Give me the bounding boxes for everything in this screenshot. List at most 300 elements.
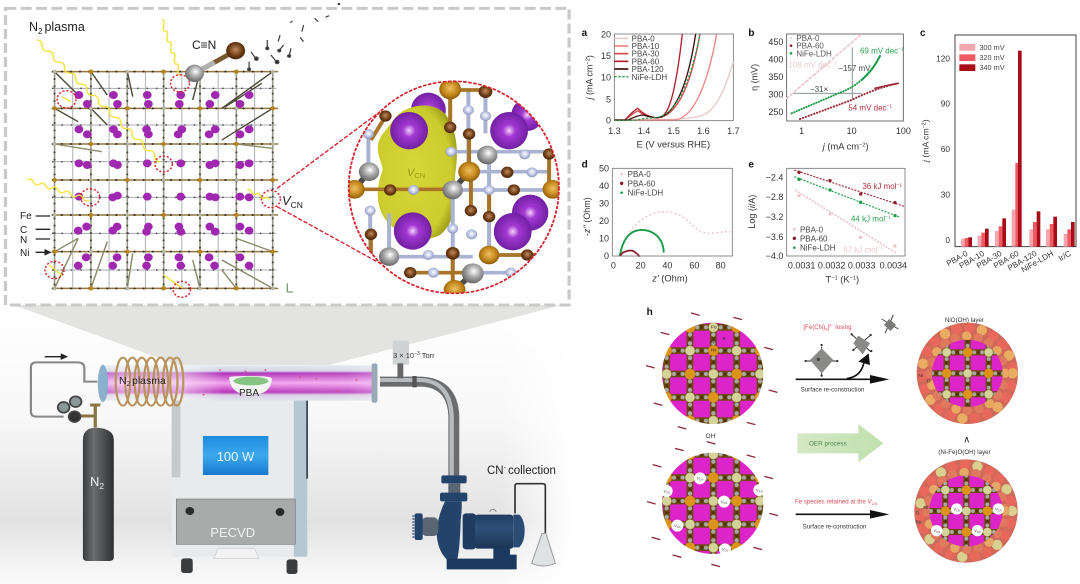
- x axis title: ): [865, 141, 869, 151]
- power display: [203, 436, 268, 475]
- data points: PBA-60: [799, 172, 895, 203]
- back spheres: [411, 92, 446, 114]
- x axis category labels: PBA-0: [945, 249, 970, 268]
- cylinder valve: [69, 405, 100, 427]
- axis ticks: −2.4: [766, 173, 783, 183]
- flow arrow: [45, 355, 67, 359]
- control panel: [176, 499, 295, 544]
- activation energy labels: −1: [897, 182, 902, 188]
- knobs: [185, 507, 284, 516]
- axis ticks: 1.4: [638, 126, 650, 136]
- axis ticks: 0.0032: [818, 260, 845, 270]
- activation energy labels: −1: [878, 246, 883, 252]
- axis ticks: −3.6: [766, 232, 783, 242]
- motor: [475, 509, 525, 549]
- data points: PBA-0: [799, 196, 895, 246]
- wheels: [181, 558, 297, 574]
- vacancy labels: V: [674, 523, 677, 528]
- x axis category labels: PBA-30: [975, 249, 1004, 270]
- potassium spheres: [78, 95, 249, 266]
- nickel atoms: [359, 146, 497, 283]
- label: N2 plasma: plasma: [44, 20, 85, 34]
- inner tan atoms: [930, 336, 1005, 411]
- legend: PBA-60: [628, 179, 656, 188]
- gauge pressure reading: 3 × 10: [393, 351, 414, 360]
- label: Fe(CN)6 losing: 6: [825, 327, 828, 332]
- lattice bonds: [355, 89, 556, 293]
- label: surface re-construction top: Surface re-construction: [801, 387, 865, 394]
- axis ticks: 0.0033: [848, 260, 875, 270]
- particle: NiO(OH) layer: [917, 323, 1018, 424]
- axis ticks: 300: [768, 89, 783, 99]
- label: CN collection: collection: [508, 465, 556, 477]
- activation energy labels: −1: [885, 215, 891, 221]
- axis ticks: 50: [599, 164, 609, 174]
- atom labels: Fe: [711, 324, 717, 330]
- axis ticks: 80: [716, 260, 726, 270]
- y axis title: −2: [585, 58, 591, 65]
- atom labels: [711, 324, 727, 353]
- label: OH-: OH: [706, 433, 715, 440]
- vacancy labels: CN: [699, 478, 703, 482]
- x axis title: −1: [850, 275, 856, 281]
- legend: [959, 43, 1005, 72]
- panel letter: a: [582, 28, 588, 39]
- pristine core: [932, 340, 1003, 407]
- panel letter: c: [920, 28, 926, 39]
- series: [787, 34, 898, 119]
- data points: NiFe-LDH: [799, 179, 895, 216]
- axis ticks: 350: [768, 72, 783, 82]
- x axis category labels: Ir/C: [1057, 249, 1073, 263]
- vacancy labels: CN: [977, 530, 981, 534]
- collection tube: [515, 484, 545, 533]
- atom labels: N: [711, 339, 715, 345]
- curved arrow head: [858, 353, 870, 365]
- PBA sample boat: [229, 376, 272, 395]
- y axis title: η (mV): [749, 64, 759, 91]
- label: Fe(CN)6 losing: losing: [834, 324, 852, 331]
- label: CN collection: -: [504, 465, 507, 472]
- label: Fe: Fe: [20, 211, 32, 222]
- legend: 320 mV: [979, 53, 1005, 62]
- nitrogen atoms: [363, 105, 537, 278]
- axis ticks: 60: [689, 260, 699, 270]
- label: Fe species retained: Fe species retained at the V: [795, 499, 872, 506]
- x axis title: −2: [859, 142, 865, 148]
- floor fade at right edge: [500, 305, 573, 584]
- tan shell atoms: [922, 328, 1013, 419]
- vacancy labels: V: [933, 528, 936, 533]
- x axis title: ): [856, 274, 859, 284]
- legend: PBA-60: [632, 57, 660, 66]
- slope annotations: −1: [887, 104, 892, 110]
- axis ticks: 15: [601, 51, 611, 61]
- plot frame: [787, 34, 903, 121]
- collection flask: [532, 533, 555, 566]
- vacancy labels: CN: [998, 508, 1002, 512]
- labels: crystal panel: [20, 20, 425, 259]
- label: Ni: Ni: [20, 248, 29, 259]
- hydroxide ions: [646, 313, 778, 567]
- label: N2 plasma in tube: plasma: [132, 375, 166, 387]
- slope annotations: 108 mV dec: [788, 60, 831, 69]
- legend: NiFe-LDH: [796, 49, 832, 58]
- inner shell atoms: [927, 472, 1005, 550]
- x axis title: T: [826, 274, 831, 284]
- legend: PBA-0: [628, 170, 651, 179]
- activation energy labels: 36 kJ mol: [862, 182, 897, 191]
- panel letter: b: [748, 28, 754, 39]
- floor shading: [0, 305, 572, 584]
- potassium sphere: [394, 212, 432, 250]
- reaction arrow: top: [796, 353, 889, 384]
- particle: (Ni-Fe)O(OH) layer: [914, 459, 1018, 563]
- vacancy labels: V: [697, 476, 699, 481]
- vacancy sites: [661, 472, 765, 555]
- axis ticks: 0.0034: [880, 260, 907, 270]
- x axis category labels: [945, 249, 1073, 274]
- Fe(CN)6 cluster far: [882, 315, 898, 333]
- shell atom labels: Fe: [915, 520, 921, 526]
- y axis title: j (mA cm: [584, 65, 594, 100]
- y axis title: j (mA cm: [920, 128, 930, 162]
- N2 feed pipe: [31, 362, 97, 417]
- label: Fe(CN)6 losing: 3−: [829, 323, 834, 328]
- activation energy labels: 44 kJ mol: [851, 214, 885, 223]
- panel: PECVD apparatus: [31, 341, 454, 574]
- PECVD machine: [172, 395, 308, 574]
- plot frame: [787, 168, 905, 256]
- bars: 320 mV: [965, 163, 1071, 247]
- slope annotations: [788, 46, 904, 112]
- label: Fe species retained: CN: [872, 501, 878, 506]
- panel letter: h: [647, 307, 653, 318]
- x axis title: E (V versus RHE): [637, 139, 710, 149]
- reaction arrow: bottom: [796, 510, 889, 519]
- legend: PBA-0: [796, 34, 820, 43]
- axis ticks: 20: [601, 29, 611, 39]
- label: cyanide bond: C≡N: [192, 38, 216, 52]
- y axis ticks: [936, 53, 950, 245]
- zoomed vacancy view: [344, 79, 563, 300]
- axis ticks: 0.0031: [788, 260, 815, 270]
- released small molecules: [248, 3, 340, 71]
- plasma tube: [98, 363, 377, 403]
- axis ticks: 40: [599, 181, 609, 191]
- axis ticks: 1.7: [727, 126, 740, 136]
- shell atom labels: O: [927, 378, 931, 384]
- axis ticks: 1.6: [697, 126, 710, 136]
- curves: [614, 34, 733, 120]
- slope annotations: −1: [831, 61, 837, 67]
- Fe(CN)6 cluster leaving: [852, 334, 871, 354]
- shell atom labels: O: [916, 510, 920, 516]
- slope annotations: 69 mV dec: [860, 46, 898, 55]
- shell atom labels: Ni: [923, 505, 928, 511]
- y axis title: Log (i/A): [747, 195, 757, 229]
- vacancy labels: CN: [723, 501, 727, 505]
- axis ticks: 10: [599, 234, 609, 244]
- axis ticks: 1: [799, 126, 804, 136]
- legend: PBA-10: [632, 42, 660, 51]
- x axis title: (K: [838, 274, 850, 284]
- slope annotations: −157 mV: [838, 64, 871, 73]
- chart a: polarization curves: [582, 28, 740, 149]
- pale lattice nodes: [55, 72, 273, 288]
- pressure regulators: [58, 396, 81, 422]
- gauge pressure reading: −3: [414, 351, 420, 357]
- series: [620, 212, 732, 256]
- layer label: NiO(OH): NiO(OH) layer: [945, 317, 984, 324]
- axis ticks: [768, 37, 911, 136]
- pressure gauge: [393, 341, 409, 378]
- legend: PBA-0: [800, 225, 824, 234]
- Fe(CN)6 cluster on surface: [806, 345, 837, 377]
- y axis title: −2: [921, 122, 927, 128]
- particle: surface with vacancies: [661, 453, 765, 555]
- axis ticks: [766, 173, 907, 270]
- axis ticks: 0: [604, 251, 609, 261]
- vacancy labels: CN: [956, 508, 960, 512]
- back sphere upper right: [512, 102, 539, 131]
- vacancy sites: [931, 503, 1004, 536]
- legend: PBA-0: [632, 34, 655, 43]
- x axis title: j (mA cm: [823, 141, 859, 151]
- axis ticks: 20: [599, 216, 609, 226]
- potassium sphere: [390, 112, 428, 149]
- x axis category labels: PBA-10: [958, 249, 986, 270]
- axis ticks: 20: [636, 260, 646, 270]
- legend: [790, 34, 832, 58]
- potassium sphere: [494, 213, 532, 250]
- machine label: PECVD: [210, 525, 255, 540]
- legend: [793, 225, 836, 253]
- plot frame: [955, 35, 1076, 247]
- legend: 300 mV: [979, 43, 1005, 52]
- particle: pristine surface: [662, 323, 763, 424]
- legend: NiFe-LDH: [628, 189, 663, 198]
- gauge pressure reading: Torr: [420, 351, 435, 360]
- legend: PBA-60: [796, 42, 824, 51]
- axis ticks: 30: [599, 199, 609, 209]
- legend: PBA-60: [800, 234, 828, 243]
- chart d: Nyquist plot: [582, 159, 732, 284]
- atom labels: Ni: [711, 347, 716, 353]
- potassium sphere: [512, 195, 548, 231]
- axis ticks: 1.3: [608, 126, 621, 136]
- pump coupling: [463, 513, 476, 549]
- outer shell atoms: [922, 328, 1013, 419]
- axis ticks: 250: [768, 107, 783, 117]
- y axis title: -z'' (Ohm): [582, 197, 592, 236]
- y axis ticks: 90: [941, 98, 950, 108]
- bars: 340 mV: [968, 51, 1075, 247]
- comparison symbol: ∧: [963, 434, 970, 444]
- OER process arrow: [797, 424, 883, 462]
- activation energy labels: 67 kJ mol: [843, 245, 878, 254]
- chart e: Arrhenius plot: [747, 159, 907, 284]
- lattice grid: [53, 72, 278, 290]
- y axis title: ): [920, 119, 930, 122]
- label: vacancy in zoom: V: [407, 167, 416, 179]
- N2 plasma beams: [27, 20, 269, 288]
- vacancy labels: CN: [666, 490, 670, 494]
- vacancy labels: V: [663, 488, 666, 493]
- vacancy labels: V: [756, 487, 759, 492]
- label: N2 plasma in tube: 2: [127, 381, 131, 388]
- y axis ticks: 120: [936, 53, 950, 63]
- yellow vacancy isosurface: [378, 105, 457, 239]
- panel h: surface reconstruction schematic: [646, 307, 1018, 567]
- plot frame: [612, 168, 732, 256]
- cyanide molecule: [185, 42, 245, 82]
- panel letter: e: [748, 159, 754, 170]
- plasma sparks: [204, 370, 356, 395]
- axis ticks: [601, 29, 740, 136]
- axis ticks: −3.2: [766, 212, 783, 222]
- inner shell atoms: [930, 336, 1005, 411]
- label: N2 plasma: N: [29, 20, 38, 34]
- element legend arrows: [36, 216, 50, 252]
- iron atoms: [344, 79, 563, 300]
- pump flanges and neck: [437, 475, 467, 559]
- labels: apparatus: [90, 351, 556, 540]
- label: N: N: [20, 235, 27, 246]
- vacancy labels: V: [995, 506, 998, 511]
- shell atom labels: Ni: [918, 373, 923, 379]
- panel letter: d: [582, 159, 588, 170]
- axis ticks: 0: [606, 116, 611, 126]
- legend: NiFe-LDH: [800, 244, 836, 253]
- base plate: [214, 548, 259, 558]
- exhaust pipe: [380, 376, 454, 478]
- axis ticks: [599, 164, 726, 270]
- label: vacancy: CN: [291, 200, 303, 210]
- vacancy labels: V: [721, 499, 723, 504]
- label: PBA: PBA: [239, 388, 259, 399]
- axis ticks: 450: [768, 37, 783, 47]
- label: N2 plasma: 2: [38, 27, 43, 36]
- cyanide vacancy markers: [45, 75, 280, 297]
- potassium sphere: [490, 112, 528, 149]
- reference lines: [793, 47, 862, 99]
- label: Fe(CN)6 losing: ]: [827, 324, 829, 331]
- axis ticks: 400: [768, 55, 783, 65]
- chart c: current density bars: [920, 28, 1076, 274]
- label: N2 plasma in tube: N: [119, 375, 127, 387]
- shell atom labels: [918, 373, 931, 384]
- axis ticks: 10: [601, 73, 611, 83]
- iron and nickel lattice nodes: [55, 72, 273, 288]
- label: N2 cylinder: 2: [99, 481, 104, 491]
- slope annotations: 54 mV dec: [848, 103, 887, 112]
- atom labels: K: [723, 336, 727, 342]
- label: N2 cylinder: N: [90, 474, 99, 489]
- panel: crystal structure: [5, 3, 569, 305]
- legend: PBA-120: [632, 65, 664, 74]
- vacancy labels: CN: [724, 549, 728, 553]
- outer shell atoms: [920, 465, 1012, 557]
- y axis title: ): [584, 55, 594, 58]
- slope annotations: −1: [898, 47, 904, 53]
- x axis category labels: NiFe-LDH: [1020, 249, 1055, 274]
- vacancy labels: V: [953, 506, 956, 511]
- N2 gas cylinder: [58, 396, 114, 561]
- vacancy labels: CN: [677, 525, 681, 529]
- legend: 340 mV: [979, 63, 1005, 72]
- axis ticks: 0: [611, 260, 616, 270]
- axis ticks: 40: [662, 260, 672, 270]
- vacancy labels: [663, 476, 1002, 553]
- vacuum pump: [413, 475, 555, 569]
- crystal axis: [287, 283, 293, 292]
- label: vacancy in zoom: CN: [414, 171, 425, 180]
- pump inlet: [413, 513, 438, 540]
- vacancy labels: CN: [936, 530, 940, 534]
- layer label: (Ni-Fe)O(OH): (Ni-Fe)O(OH) layer: [938, 449, 991, 456]
- x axis category labels: PBA-60: [992, 249, 1021, 270]
- label: C: C: [20, 225, 27, 236]
- heating coil: [116, 358, 183, 406]
- inner tan atoms: [927, 472, 1005, 550]
- x axis category labels: PBA-120: [1006, 249, 1039, 273]
- axis ticks: 1.5: [667, 126, 680, 136]
- vacancy labels: CN: [759, 489, 763, 493]
- core with vacancies: [929, 476, 1003, 546]
- shell atom labels: [915, 505, 928, 526]
- axis ticks: 5: [606, 94, 611, 104]
- legend: NiFe-LDH: [632, 73, 667, 82]
- x axis title: −1: [831, 275, 838, 281]
- chart b: Tafel plot: [748, 28, 911, 151]
- axis ticks: −4.0: [766, 251, 783, 261]
- pale shell atoms: [920, 465, 1012, 557]
- axis ticks: −2.8: [766, 192, 783, 202]
- charts a, b, d, e: [582, 28, 911, 284]
- y axis ticks: 0: [945, 235, 950, 245]
- legend: PBA-30: [632, 50, 660, 59]
- axis ticks: 10: [847, 126, 857, 136]
- label: surface re-construction bottom: Surface re-construction: [803, 523, 867, 530]
- fit lines: [794, 170, 905, 253]
- vacancy labels: V: [722, 547, 724, 552]
- x axis title: z' (Ohm): [651, 274, 688, 284]
- bars: 300 mV: [961, 210, 1067, 247]
- label: vacancy: V: [282, 193, 292, 208]
- curved release arrow: [847, 362, 864, 379]
- plot frame: [614, 34, 733, 121]
- label: CN collection: CN: [487, 465, 504, 477]
- zoom guide lines: [277, 112, 380, 263]
- label: OH-: -: [715, 432, 717, 437]
- y axis ticks: 60: [941, 144, 950, 154]
- vacancy labels: V: [974, 528, 977, 533]
- axis ticks: 100: [896, 126, 911, 136]
- label: Fe(CN)6 losing: [Fe(CN): [803, 324, 825, 331]
- projection beam from apparatus to crystal panel: [8, 303, 570, 365]
- legend: [620, 170, 663, 198]
- pump base: [447, 548, 517, 569]
- power reading: 100 W: [217, 449, 255, 464]
- label: OER process: OER process: [809, 440, 847, 447]
- dashed panel frame: [5, 8, 569, 305]
- y axis ticks: 30: [941, 189, 950, 199]
- carbon atoms: [365, 85, 555, 278]
- legend: [614, 34, 667, 82]
- activation energy labels: [843, 182, 902, 254]
- slope annotations: −31×: [810, 85, 829, 94]
